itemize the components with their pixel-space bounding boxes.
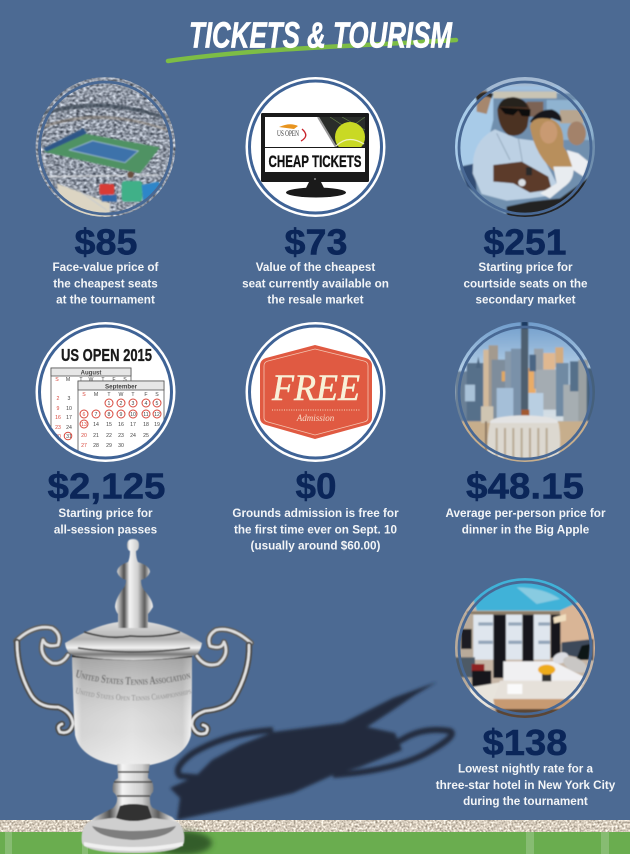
icon: calendar: M	[94, 392, 98, 398]
caption: (usually around $60.00)	[251, 540, 381, 553]
panel: resale seat	[242, 77, 389, 307]
icon: calendar: 4	[145, 401, 148, 407]
ring	[459, 582, 591, 714]
panel: hotel rate	[436, 577, 616, 808]
caption: three-star hotel in New York City	[436, 779, 616, 792]
icon: free badge: FREE	[271, 368, 360, 409]
icon: calendar: 2	[57, 396, 60, 402]
icon: calendar: 9	[57, 406, 60, 412]
icon: calendar: T	[79, 377, 83, 383]
icon: calendar: T	[107, 392, 111, 398]
icon: calendar: 29	[106, 443, 112, 449]
icon: tv cheap tickets: CHEAP TICKETS	[268, 152, 362, 171]
price: $251	[484, 222, 566, 262]
caption: Average per-person price for	[446, 507, 606, 520]
icon: calendar: F	[112, 377, 116, 383]
icon: calendar: 23	[55, 425, 61, 431]
panel: all-session passes	[36, 322, 176, 536]
icon: calendar: S	[123, 377, 127, 383]
icon: calendar: 15	[106, 422, 112, 428]
icon: calendar: 23	[118, 433, 124, 439]
caption: Face-value price of	[53, 261, 159, 274]
icon: calendar: 11	[143, 412, 149, 418]
icon: calendar: 30	[55, 434, 61, 440]
caption: dinner in the Big Apple	[462, 523, 590, 536]
trophy base	[82, 817, 184, 853]
price: $48.15	[466, 466, 584, 506]
icon: calendar: 14	[93, 422, 99, 428]
ring	[250, 326, 382, 458]
icon: white disc	[36, 322, 176, 462]
caption: during the tournament	[463, 795, 588, 808]
icon: tv cheap tickets	[261, 113, 369, 198]
icon: calendar: 16	[55, 415, 61, 421]
icon: calendar: 7	[95, 412, 98, 418]
photo: hotel room	[453, 577, 597, 721]
icon: calendar: 1	[108, 401, 111, 407]
icon: calendar: M	[66, 377, 70, 383]
caption: Lowest nightly rate for a	[458, 762, 594, 776]
caption: Value of the cheapest	[256, 261, 375, 274]
trophy lid	[65, 622, 202, 660]
icon: calendar: 30	[118, 443, 124, 449]
photo: city dinner	[453, 321, 597, 465]
icon: calendar: 17	[130, 422, 136, 428]
photo: courtside couple	[453, 75, 597, 220]
icon: calendar	[50, 348, 164, 450]
icon: calendar: 8	[108, 412, 111, 418]
caption: all-session passes	[54, 523, 158, 536]
icon: calendar: 5	[156, 401, 159, 407]
icon: calendar: T	[101, 377, 105, 383]
trophy cup	[72, 655, 192, 765]
price: $85	[74, 222, 138, 262]
panel: dinner price	[446, 321, 606, 536]
ring	[250, 81, 382, 213]
icon: trophy	[12, 538, 254, 854]
caption: seat currently available on	[242, 277, 389, 290]
icon: calendar: 18	[143, 422, 149, 428]
caption: Grounds admission is free for	[232, 507, 399, 520]
icon: white disc	[246, 77, 386, 217]
panel: cheapest seats	[35, 77, 176, 307]
icon: calendar: S	[55, 377, 59, 383]
icon: calendar: S	[155, 392, 159, 398]
caption: the first time ever on Sept. 10	[234, 523, 398, 536]
icon: calendar: 19	[154, 422, 160, 428]
price: $138	[482, 722, 568, 763]
icon: calendar: 9	[120, 412, 123, 418]
icon: tv cheap tickets: US OPEN	[277, 129, 299, 138]
icon: calendar: T	[131, 392, 135, 398]
icon: calendar: 27	[81, 443, 87, 449]
panel: free admission	[232, 322, 399, 553]
icon: calendar: 24	[66, 425, 72, 431]
icon: calendar: 6	[83, 412, 86, 418]
icon: calendar: 17	[66, 415, 72, 421]
trophy engraving	[76, 670, 192, 701]
icon: calendar: 24	[130, 433, 136, 439]
panel: courtside seats	[453, 75, 597, 307]
ring	[40, 82, 172, 214]
title: TICKETS & TOURISM	[189, 14, 453, 56]
trophy engraving: United States Open Tennis Championships	[76, 688, 192, 701]
grass strip	[0, 832, 630, 854]
caption: the cheapest seats	[53, 277, 158, 290]
icon: calendar: S	[82, 392, 86, 398]
icon: calendar: 28	[93, 443, 99, 449]
ring	[40, 326, 172, 458]
trophy ground shadow	[152, 831, 212, 854]
icon: white disc	[246, 322, 386, 462]
icon: calendar: September	[105, 384, 138, 390]
trophy handles	[16, 627, 251, 734]
caption: at the tournament	[56, 294, 155, 307]
price: $73	[284, 222, 348, 262]
price: $2,125	[48, 466, 166, 506]
icon: calendar: 3	[132, 401, 135, 407]
ring	[459, 82, 591, 214]
price: $0	[296, 466, 336, 506]
caption: secondary market	[475, 294, 576, 307]
ring	[459, 327, 591, 459]
icon: calendar: 16	[118, 422, 124, 428]
caption: courtside seats on the	[463, 277, 588, 290]
icon: calendar: W	[89, 377, 94, 383]
trophy finial	[115, 539, 153, 628]
icon: calendar: W	[119, 392, 124, 398]
icon: calendar: 2	[120, 401, 123, 407]
icon: calendar: August	[81, 370, 101, 376]
icon: calendar: 31	[66, 434, 72, 440]
trophy stem	[88, 764, 178, 823]
caption: Starting price for	[58, 507, 153, 520]
shadow of trophy	[170, 682, 452, 820]
icon: calendar: 3	[68, 396, 71, 402]
icon: calendar: US OPEN 2015	[61, 345, 152, 365]
caption: the resale market	[267, 294, 364, 307]
gravel strip	[0, 820, 630, 833]
icon: calendar: 10	[66, 406, 72, 412]
icon: calendar: 13	[81, 422, 87, 428]
trophy engraving: United States Tennis Association	[76, 670, 191, 686]
icon: calendar: 22	[106, 433, 112, 439]
icon: calendar: F	[144, 392, 148, 398]
icon: free badge	[260, 345, 372, 439]
icon: calendar: 20	[81, 433, 87, 439]
title	[168, 14, 456, 61]
icon: calendar: 12	[154, 412, 160, 418]
photo: stadium	[35, 77, 176, 218]
caption: Starting price for	[478, 261, 573, 274]
icon: calendar: 25	[143, 433, 149, 439]
icon: free badge: Admission	[296, 413, 335, 423]
icon: calendar: 21	[93, 433, 99, 439]
icon: calendar: 10	[130, 412, 136, 418]
